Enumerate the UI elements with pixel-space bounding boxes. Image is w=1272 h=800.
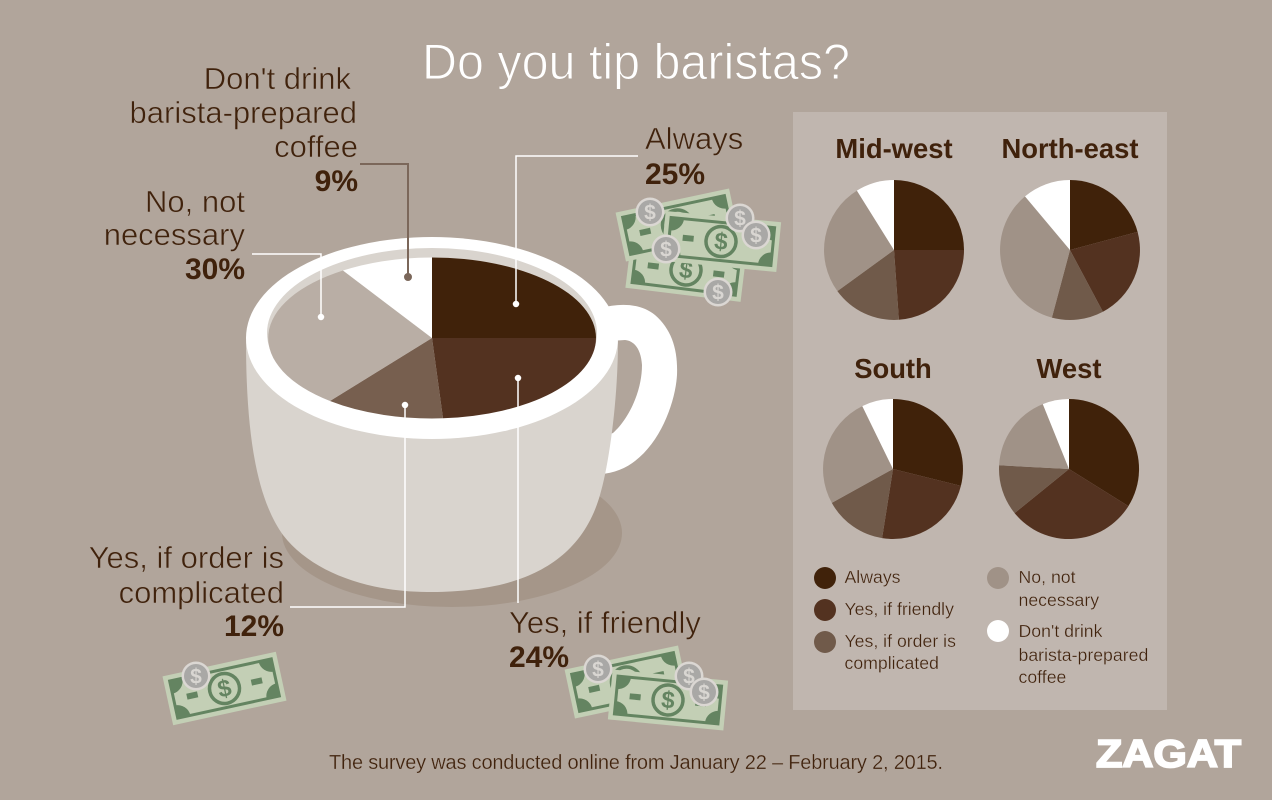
icon: three bills with coins: $: [712, 282, 724, 304]
icon: three bills with coins: $: [668, 211, 688, 240]
leader line: yes, if friendly: [516, 376, 520, 603]
label: always: 25%: [645, 158, 705, 191]
slice: yes, if friendly 24%: [432, 338, 596, 418]
label: yes, if friendly: Yes, if friendly: [509, 605, 701, 640]
heading: South: South: [854, 353, 932, 384]
slice: no, not necessary 30%: [268, 270, 432, 401]
leader line: don't drink: [360, 164, 411, 280]
legend item: don't drink barista-prepared coffee: barista-prepared: [1018, 645, 1148, 665]
legend item: yes, if order is complicated: Yes, if order is: [844, 631, 956, 651]
icon: three bills with coins: $: [713, 228, 730, 256]
slice: don't drink 9%: [343, 258, 432, 338]
label: always: [645, 121, 743, 191]
label: don't drink barista-prepared coffee: [130, 61, 358, 198]
label: yes, if order is complicated: 12%: [224, 610, 284, 643]
icon: three bills with coins: $: [678, 256, 695, 285]
icon: single bill with coin: $: [190, 666, 202, 688]
icon: two bills with coins: $: [683, 666, 695, 688]
cup body: [246, 340, 618, 592]
label: don't drink barista-prepared coffee: barista-prepared: [130, 95, 357, 130]
icon: two bills with coins: $: [592, 658, 604, 682]
coffee cup illustration: [246, 237, 677, 607]
legend item: no, not necessary: No, not: [1018, 567, 1076, 587]
label: yes, if order is complicated: [89, 540, 284, 643]
coffee pie chart: [268, 258, 596, 418]
legend: [814, 567, 1148, 687]
pie chart: West: [999, 399, 1139, 539]
label: no, not necessary: No, not: [145, 184, 245, 219]
icon: three bills with coins: $: [734, 208, 746, 230]
icon: three bills with coins: [616, 188, 781, 306]
pie chart: South: [823, 399, 963, 539]
label: no, not necessary: necessary: [104, 217, 245, 252]
legend item: no, not necessary: [987, 567, 1099, 610]
panel: regional breakdown: [793, 112, 1167, 710]
legend item: no, not necessary: necessary: [1018, 590, 1099, 610]
legend item: always: [814, 567, 901, 589]
footnote: The survey was conducted online from January 22 – February 2, 2015.: [329, 752, 943, 774]
panel background: [793, 112, 1167, 710]
leader line: always: [514, 156, 638, 306]
legend item: don't drink barista-prepared coffee: coffee: [1018, 667, 1067, 687]
legend item: yes, if order is complicated: [814, 631, 956, 673]
label: no, not necessary: 30%: [185, 253, 245, 286]
slice: always 25%: [432, 258, 596, 338]
legend item: yes, if order is complicated: complicated: [844, 653, 939, 673]
slice: yes, if order is complicated 12%: [330, 338, 443, 418]
cup rim: [246, 237, 618, 439]
legend item: yes, if friendly: Yes, if friendly: [844, 599, 954, 619]
icon: two bills with coins: $: [698, 682, 710, 704]
label: no, not necessary: [104, 184, 245, 286]
legend item: always: Always: [844, 567, 901, 587]
label: yes, if friendly: [509, 605, 701, 674]
logo: ZAGAT: ZAGAT: [1096, 733, 1241, 776]
label: yes, if friendly: 24%: [509, 641, 569, 674]
icon: three bills with coins: $: [660, 238, 672, 262]
leader line: yes, if order is complicated: [290, 402, 408, 607]
icon: single bill with coin: [163, 652, 286, 725]
icon: two bills with coins: $: [660, 686, 677, 715]
icon: two bills with coins: [565, 645, 728, 730]
pie chart: North-east: [1000, 180, 1140, 320]
icon: three bills with coins: $: [644, 202, 656, 224]
rim inner shade: [267, 248, 597, 418]
icon: three bills with coins: $: [750, 224, 762, 248]
heading: Mid-west: Mid-west: [835, 133, 953, 164]
icon: two bills with coins: $: [617, 668, 637, 697]
label: don't drink barista-prepared coffee: coffee: [274, 129, 358, 164]
label: yes, if order is complicated: complicated: [119, 575, 284, 610]
heading: West: West: [1037, 353, 1101, 384]
heading: North-east: North-east: [1002, 133, 1138, 164]
icon: single bill with coin: $: [215, 674, 235, 704]
legend item: don't drink barista-prepared coffee: [987, 620, 1148, 687]
label: yes, if order is complicated: Yes, if order is: [89, 540, 284, 575]
cup shadow: [282, 459, 622, 607]
label: don't drink barista-prepared coffee: 9%: [315, 165, 358, 198]
cup handle: [600, 305, 677, 474]
label: always: Always: [645, 121, 743, 156]
legend item: don't drink barista-prepared coffee: Don't drink: [1018, 621, 1103, 641]
label: don't drink barista-prepared coffee: Don't drink: [204, 61, 351, 96]
pie chart: Mid-west: [824, 180, 964, 320]
title: Do you tip baristas?: [422, 34, 850, 90]
leader line: no, not necessary: [252, 254, 324, 320]
